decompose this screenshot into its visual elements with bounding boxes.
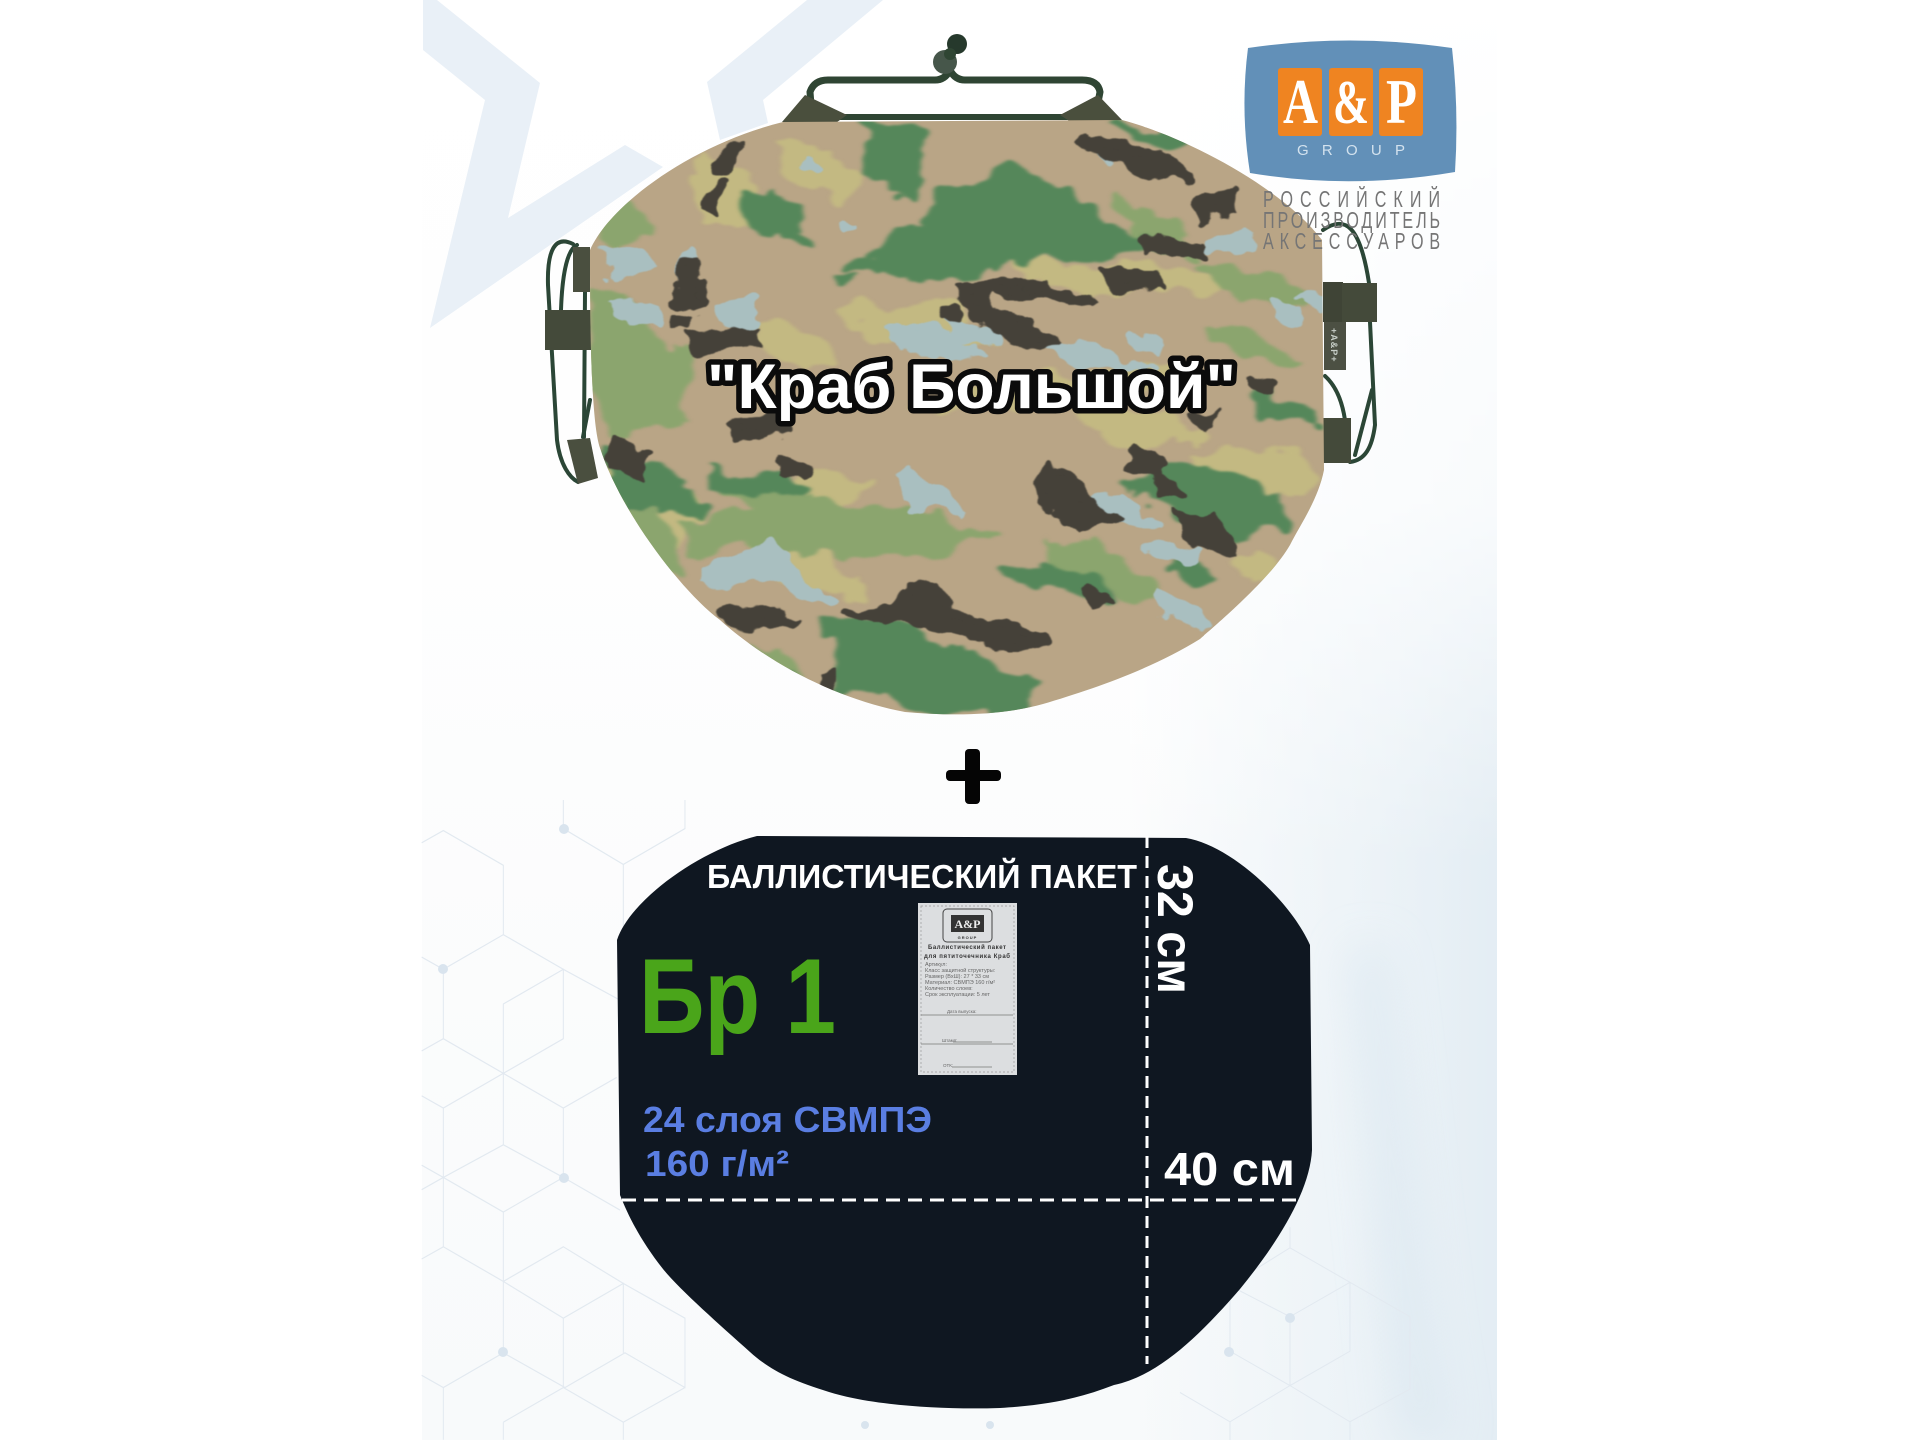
- A&P Group logo: A: [1283, 66, 1318, 137]
- logo tagline: АКСЕССУАРОВ: [1263, 229, 1440, 255]
- A&P Group logo: GROUP: [1297, 142, 1405, 159]
- dimension: 32 см: 32 см: [1147, 864, 1203, 994]
- background hexagon network right: [1180, 1227, 1410, 1440]
- package product label: Артикул:: [925, 962, 948, 968]
- olive green camouflage patches: [589, 198, 1307, 675]
- layers and density: 24 слоя СВМПЭ: [643, 1099, 932, 1140]
- layers and density: [643, 1099, 932, 1184]
- dimension: 40 см: 40 см: [1164, 1143, 1295, 1195]
- green camouflage patches: [607, 124, 1321, 713]
- camouflage pouch: [580, 110, 1340, 730]
- layers and density: 160 г/м²: [645, 1143, 789, 1184]
- package product label: [918, 903, 1017, 1075]
- A&P Group logo: P: [1386, 66, 1417, 137]
- package product label: Размер (ВхШ): 27 * 33 см: [925, 974, 989, 980]
- left side cord and straps: [545, 241, 598, 484]
- background panel: [1149, 522, 1497, 1440]
- logo tagline: [1263, 185, 1440, 255]
- blue-grey camouflage patches: [604, 146, 1325, 628]
- protection class Бр 1: Бр 1: [639, 936, 836, 1056]
- background star: [423, 0, 883, 328]
- plus sign: [946, 749, 1001, 804]
- package heading: БАЛЛИСТИЧЕСКИЙ ПАКЕТ: [707, 857, 1137, 895]
- package product label: Штамп:: [942, 1038, 957, 1043]
- light tan camouflage patches: [600, 142, 1314, 595]
- package product label: Баллистический пакет: [928, 944, 1006, 951]
- logo tagline: РОССИЙСКИЙ: [1263, 185, 1440, 213]
- package product label: GROUP: [958, 935, 977, 940]
- ballistic package: [617, 836, 1312, 1408]
- package product label: Срок эксплуатации: 5 лет: [925, 992, 990, 998]
- package product label: для пятиточечника Краб: [924, 953, 1010, 960]
- A&P Group logo: [1244, 40, 1456, 181]
- dimension dashed lines: [622, 836, 1303, 1364]
- logo tagline: ПРОИЗВОДИТЕЛЬ: [1263, 208, 1440, 234]
- background hexagon network left: [422, 800, 685, 1440]
- small A&P tag: +A&P+: [1329, 328, 1339, 363]
- top handle of the pouch: [782, 34, 1122, 127]
- package product label: A&P: [954, 917, 980, 931]
- package product label: Дата выпуска:: [947, 1009, 977, 1014]
- package product label: Материал: СВМПЭ 160 г/м²: [925, 980, 995, 986]
- background network nodes: [438, 824, 1295, 1429]
- package product label: ОТК:: [943, 1063, 953, 1068]
- package product label: Класс защитной структуры:: [925, 967, 996, 974]
- right side cord and straps: [1323, 224, 1377, 463]
- A&P Group logo: &: [1333, 69, 1369, 137]
- title: Краб Большой: "Краб Большой": [707, 352, 1236, 422]
- dark camouflage patches: [618, 138, 1268, 693]
- package product label: Количество слоев:: [925, 986, 973, 992]
